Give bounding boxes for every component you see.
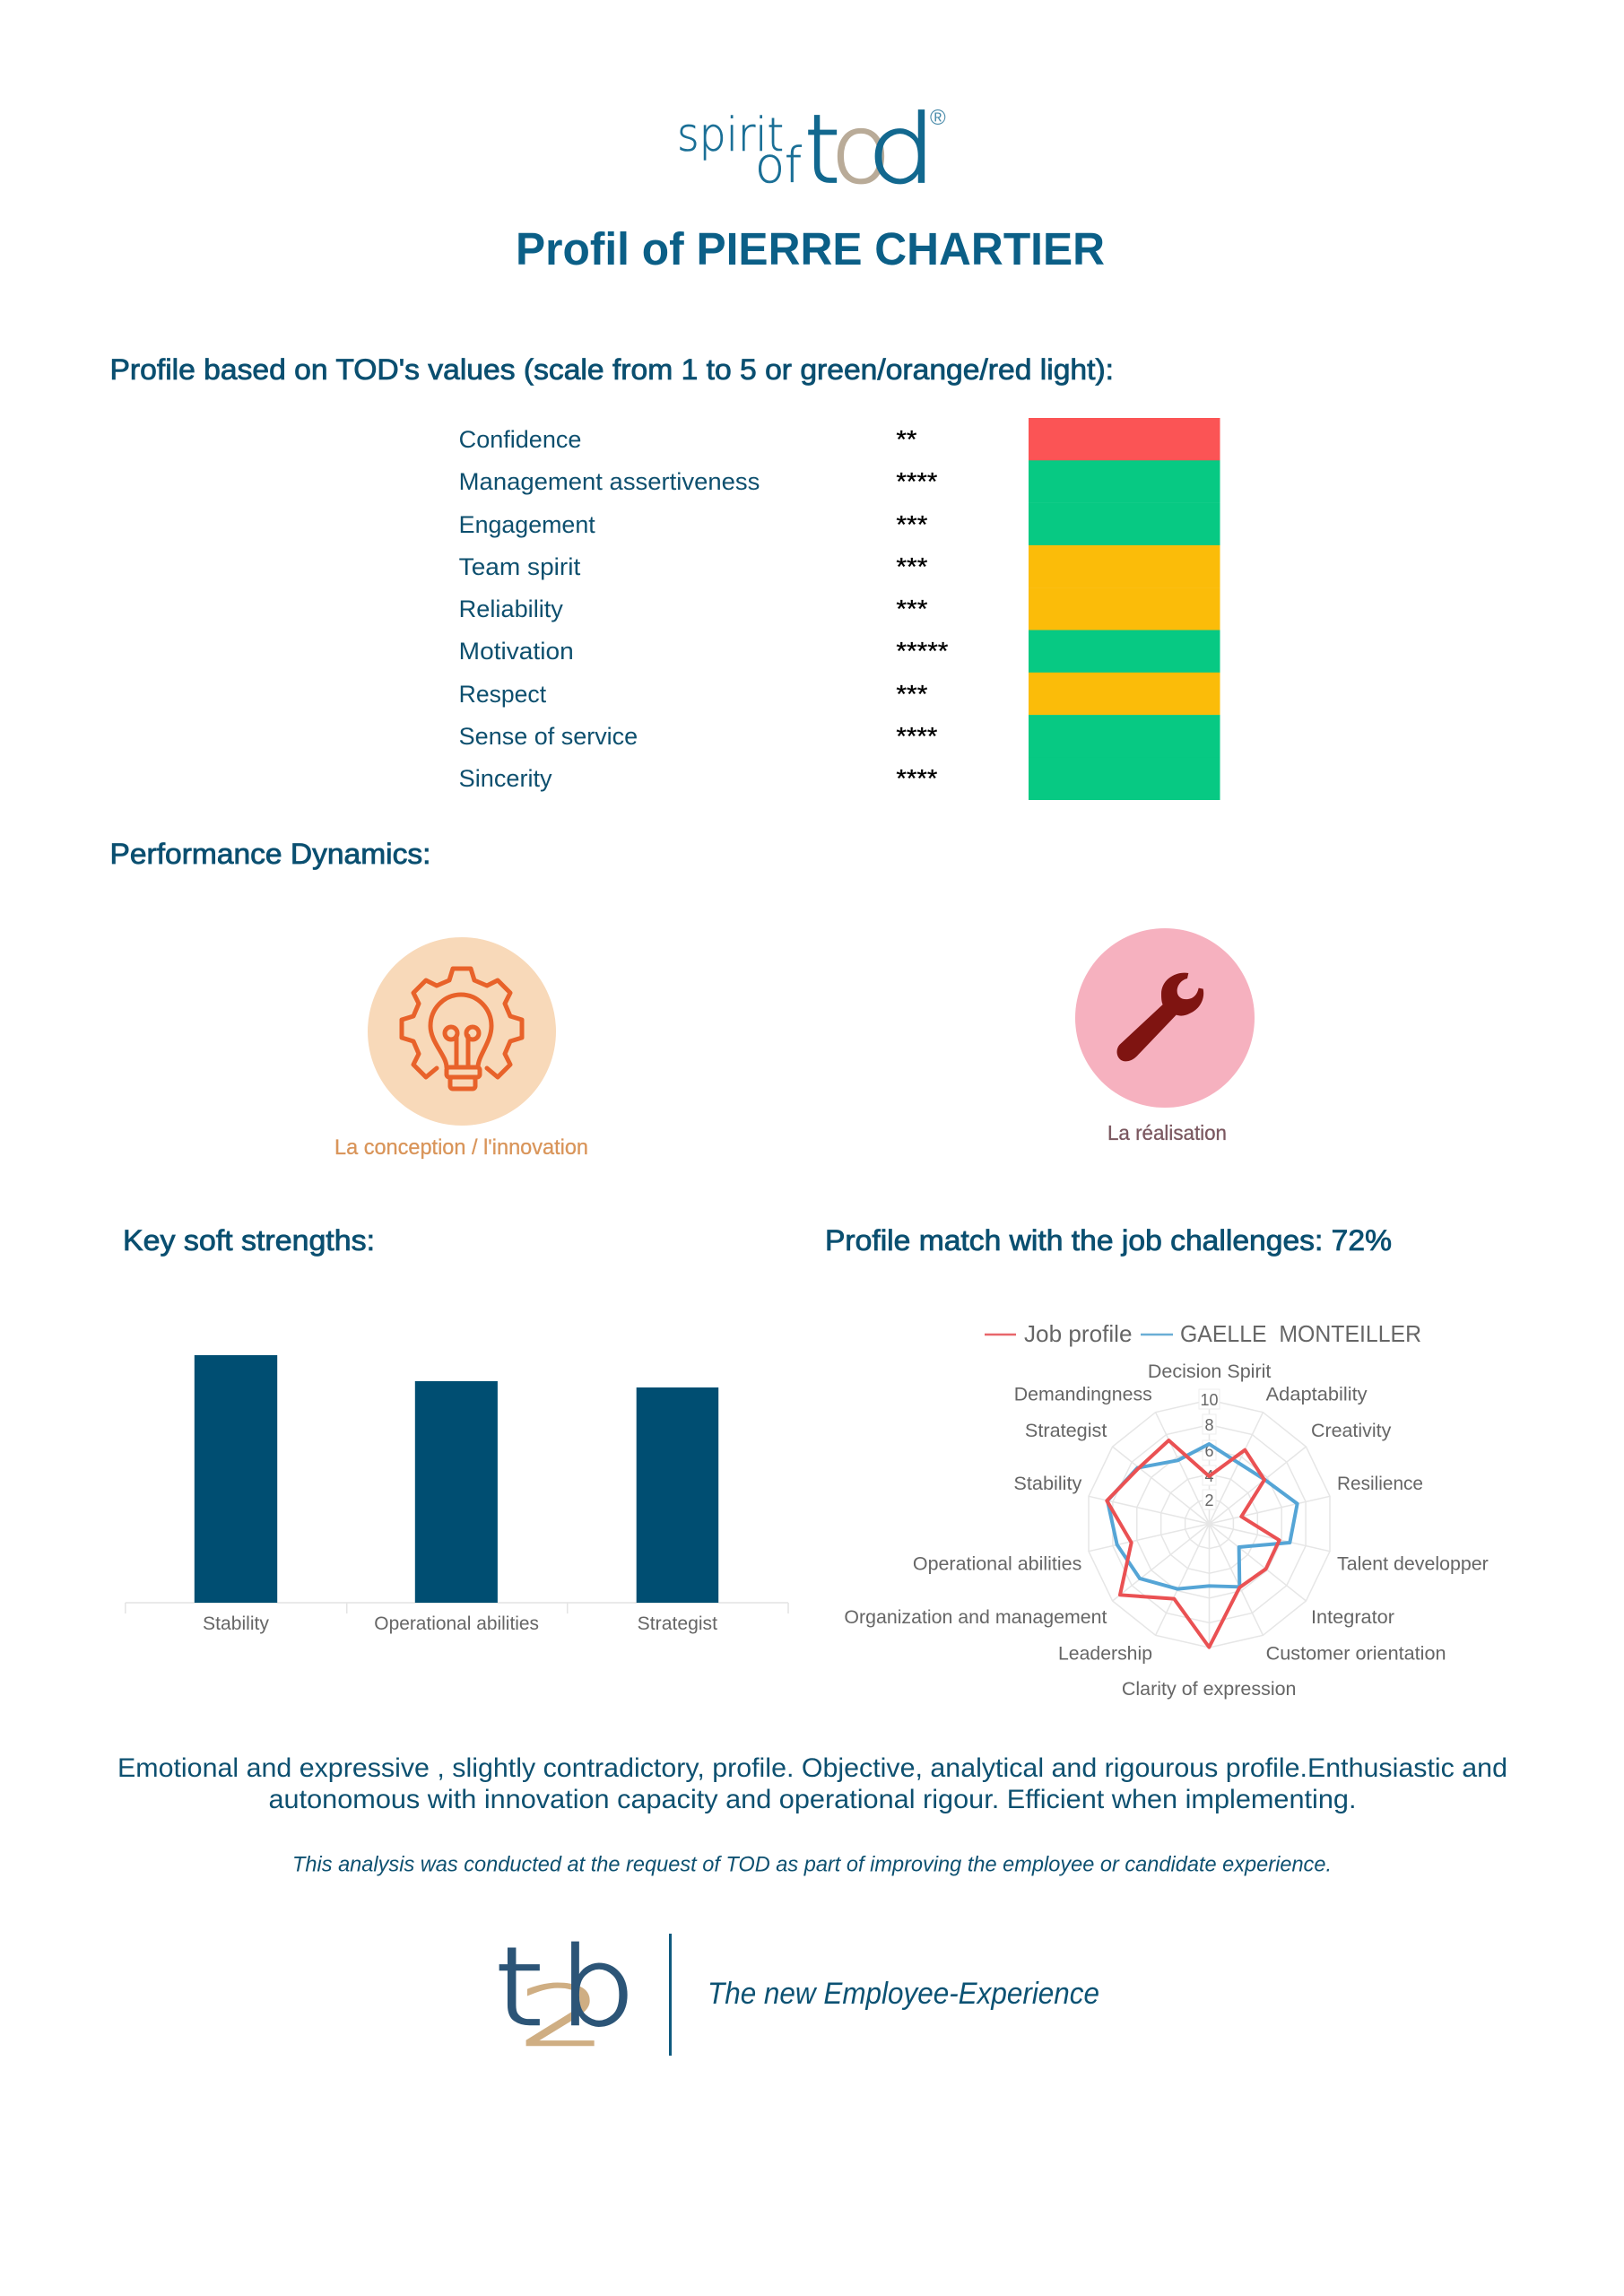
axis labels: Operational abilities: [913, 1554, 1081, 1575]
scale ticks: 10: [1200, 1391, 1219, 1409]
series: candidate (blue): [1107, 1444, 1298, 1589]
axis labels: Creativity: [1311, 1421, 1392, 1441]
axis labels: Talent developper: [1337, 1554, 1489, 1575]
panel: values table: [459, 418, 1220, 800]
row: Team spirit: ***: [896, 552, 927, 580]
scale ticks: 2: [1204, 1492, 1214, 1509]
logo: t2b: [494, 1926, 636, 2065]
row: Sense of service: Sense of service: [459, 723, 638, 750]
axis label: Stability: Stability: [203, 1613, 270, 1634]
heading: profile match: Profile match with the job challenges: 72%: [825, 1224, 1392, 1257]
text block: profile summary: autonomous with innovation capacity and operational rigour. Efficient when implementing.: [269, 1785, 1356, 1814]
row: Confidence: Confidence: [459, 426, 581, 453]
row: Sincerity: ****: [896, 764, 938, 792]
axis labels: [844, 1361, 1489, 1700]
row: Reliability: Reliability: [459, 596, 564, 622]
row: Sincerity: Sincerity: [459, 765, 552, 792]
row: Management assertiveness: [459, 460, 1220, 503]
scale ticks: 6: [1204, 1442, 1214, 1460]
row: Sincerity: [459, 757, 1220, 800]
row: Motivation: *****: [896, 637, 949, 665]
logo: spirit of tod: [677, 95, 946, 204]
row: Motivation: [459, 630, 1220, 673]
series: job profile (red): [1107, 1440, 1280, 1648]
logo: t2b: b: [559, 1926, 636, 2050]
heading: key soft strengths: Key soft strengths:: [123, 1224, 375, 1257]
axis labels: Decision Spirit: [1148, 1361, 1272, 1382]
legend: GAELLE MONTEILLER: [1180, 1320, 1421, 1347]
logo: spirit of tod: o: [830, 95, 891, 204]
row: Confidence: [459, 418, 1220, 461]
radar chart: job profile match: [844, 1320, 1489, 1700]
row: Motivation: Motivation: [459, 638, 574, 665]
row: Engagement: Engagement: [459, 511, 595, 538]
axis labels: Stability: [1013, 1474, 1082, 1494]
legend: Job profile: [1024, 1320, 1132, 1347]
bar: Stability: [195, 1355, 277, 1603]
logo: spirit of tod: d: [867, 95, 936, 204]
row: Reliability: ***: [896, 595, 927, 622]
row: Engagement: ***: [896, 510, 927, 538]
axis labels: Clarity of expression: [1122, 1679, 1297, 1700]
row: Team spirit: Team spirit: [459, 553, 581, 580]
logo: spirit of tod: ®: [930, 106, 946, 130]
axis labels: Adaptability: [1266, 1385, 1368, 1405]
row: Respect: ***: [896, 680, 927, 708]
logo: t2b: t: [494, 1926, 544, 2050]
scale ticks: 4: [1204, 1467, 1214, 1485]
icon: realisation badge: [1075, 928, 1255, 1144]
logo: spirit of tod: t: [804, 95, 840, 204]
heading: performance dynamics: Performance Dynamics:: [109, 838, 430, 870]
label: innovation: La conception / l'innovation: [334, 1135, 588, 1160]
row: Respect: Respect: [459, 681, 547, 708]
row: Management assertiveness: Management assertiveness: [459, 468, 760, 495]
axis labels: Strategist: [1025, 1421, 1107, 1441]
axis labels: Integrator: [1311, 1607, 1394, 1628]
bar: Strategist: [637, 1387, 718, 1603]
tagline: The new Employee-Experience: [708, 1977, 1099, 2011]
scale ticks: [1199, 1389, 1220, 1509]
row: Confidence: **: [896, 425, 917, 453]
logo: spirit of tod: of: [755, 137, 802, 194]
icon: gear and light bulb: [402, 969, 522, 1089]
icon: wrench: [1117, 973, 1203, 1061]
legend: [985, 1320, 1421, 1347]
text block: profile summary: [117, 1753, 1507, 1814]
axis label: Operational abilities: Operational abilities: [374, 1613, 539, 1634]
axis label: Strategist: Strategist: [638, 1613, 717, 1634]
axis labels: Organization and management: [844, 1607, 1107, 1628]
logo: spirit of tod: spirit: [677, 109, 784, 162]
heading: TOD values: Profile based on TOD's values (scale from 1 to 5 or green/orange/red light):: [109, 353, 1114, 386]
title: Profil of PIERRE CHARTIER: [516, 223, 1105, 274]
bar chart: soft strengths: [126, 1355, 788, 1634]
text block: disclaimer: This analysis was conducted at the request of TOD as part of improving the employee or candidate experience.: [292, 1853, 1332, 1876]
row: Engagement: [459, 503, 1220, 545]
axis labels: Customer orientation: [1266, 1644, 1446, 1665]
label: realisation: La réalisation: [1107, 1121, 1227, 1144]
text block: profile summary: Emotional and expressive , slightly contradictory, profile. Objective, analytical and rigourous profile.Enthusiastic and: [117, 1753, 1507, 1783]
logo: t2b: 2: [518, 1969, 606, 2065]
row: Team spirit: [459, 545, 1220, 587]
icon: innovation badge: [334, 937, 588, 1160]
row: Sense of service: [459, 715, 1220, 758]
row: Sense of service: ****: [896, 722, 938, 750]
row: Respect: [459, 673, 1220, 715]
divider: [669, 1934, 672, 2056]
row: Management assertiveness: ****: [896, 467, 938, 495]
axis labels: Leadership: [1058, 1644, 1152, 1665]
axis labels: Resilience: [1337, 1474, 1423, 1494]
radar grid: [1089, 1400, 1330, 1648]
axis labels: Demandingness: [1014, 1385, 1152, 1405]
scale ticks: 8: [1204, 1416, 1214, 1434]
bar: Operational abilities: [415, 1381, 498, 1603]
row: Reliability: [459, 587, 1220, 631]
